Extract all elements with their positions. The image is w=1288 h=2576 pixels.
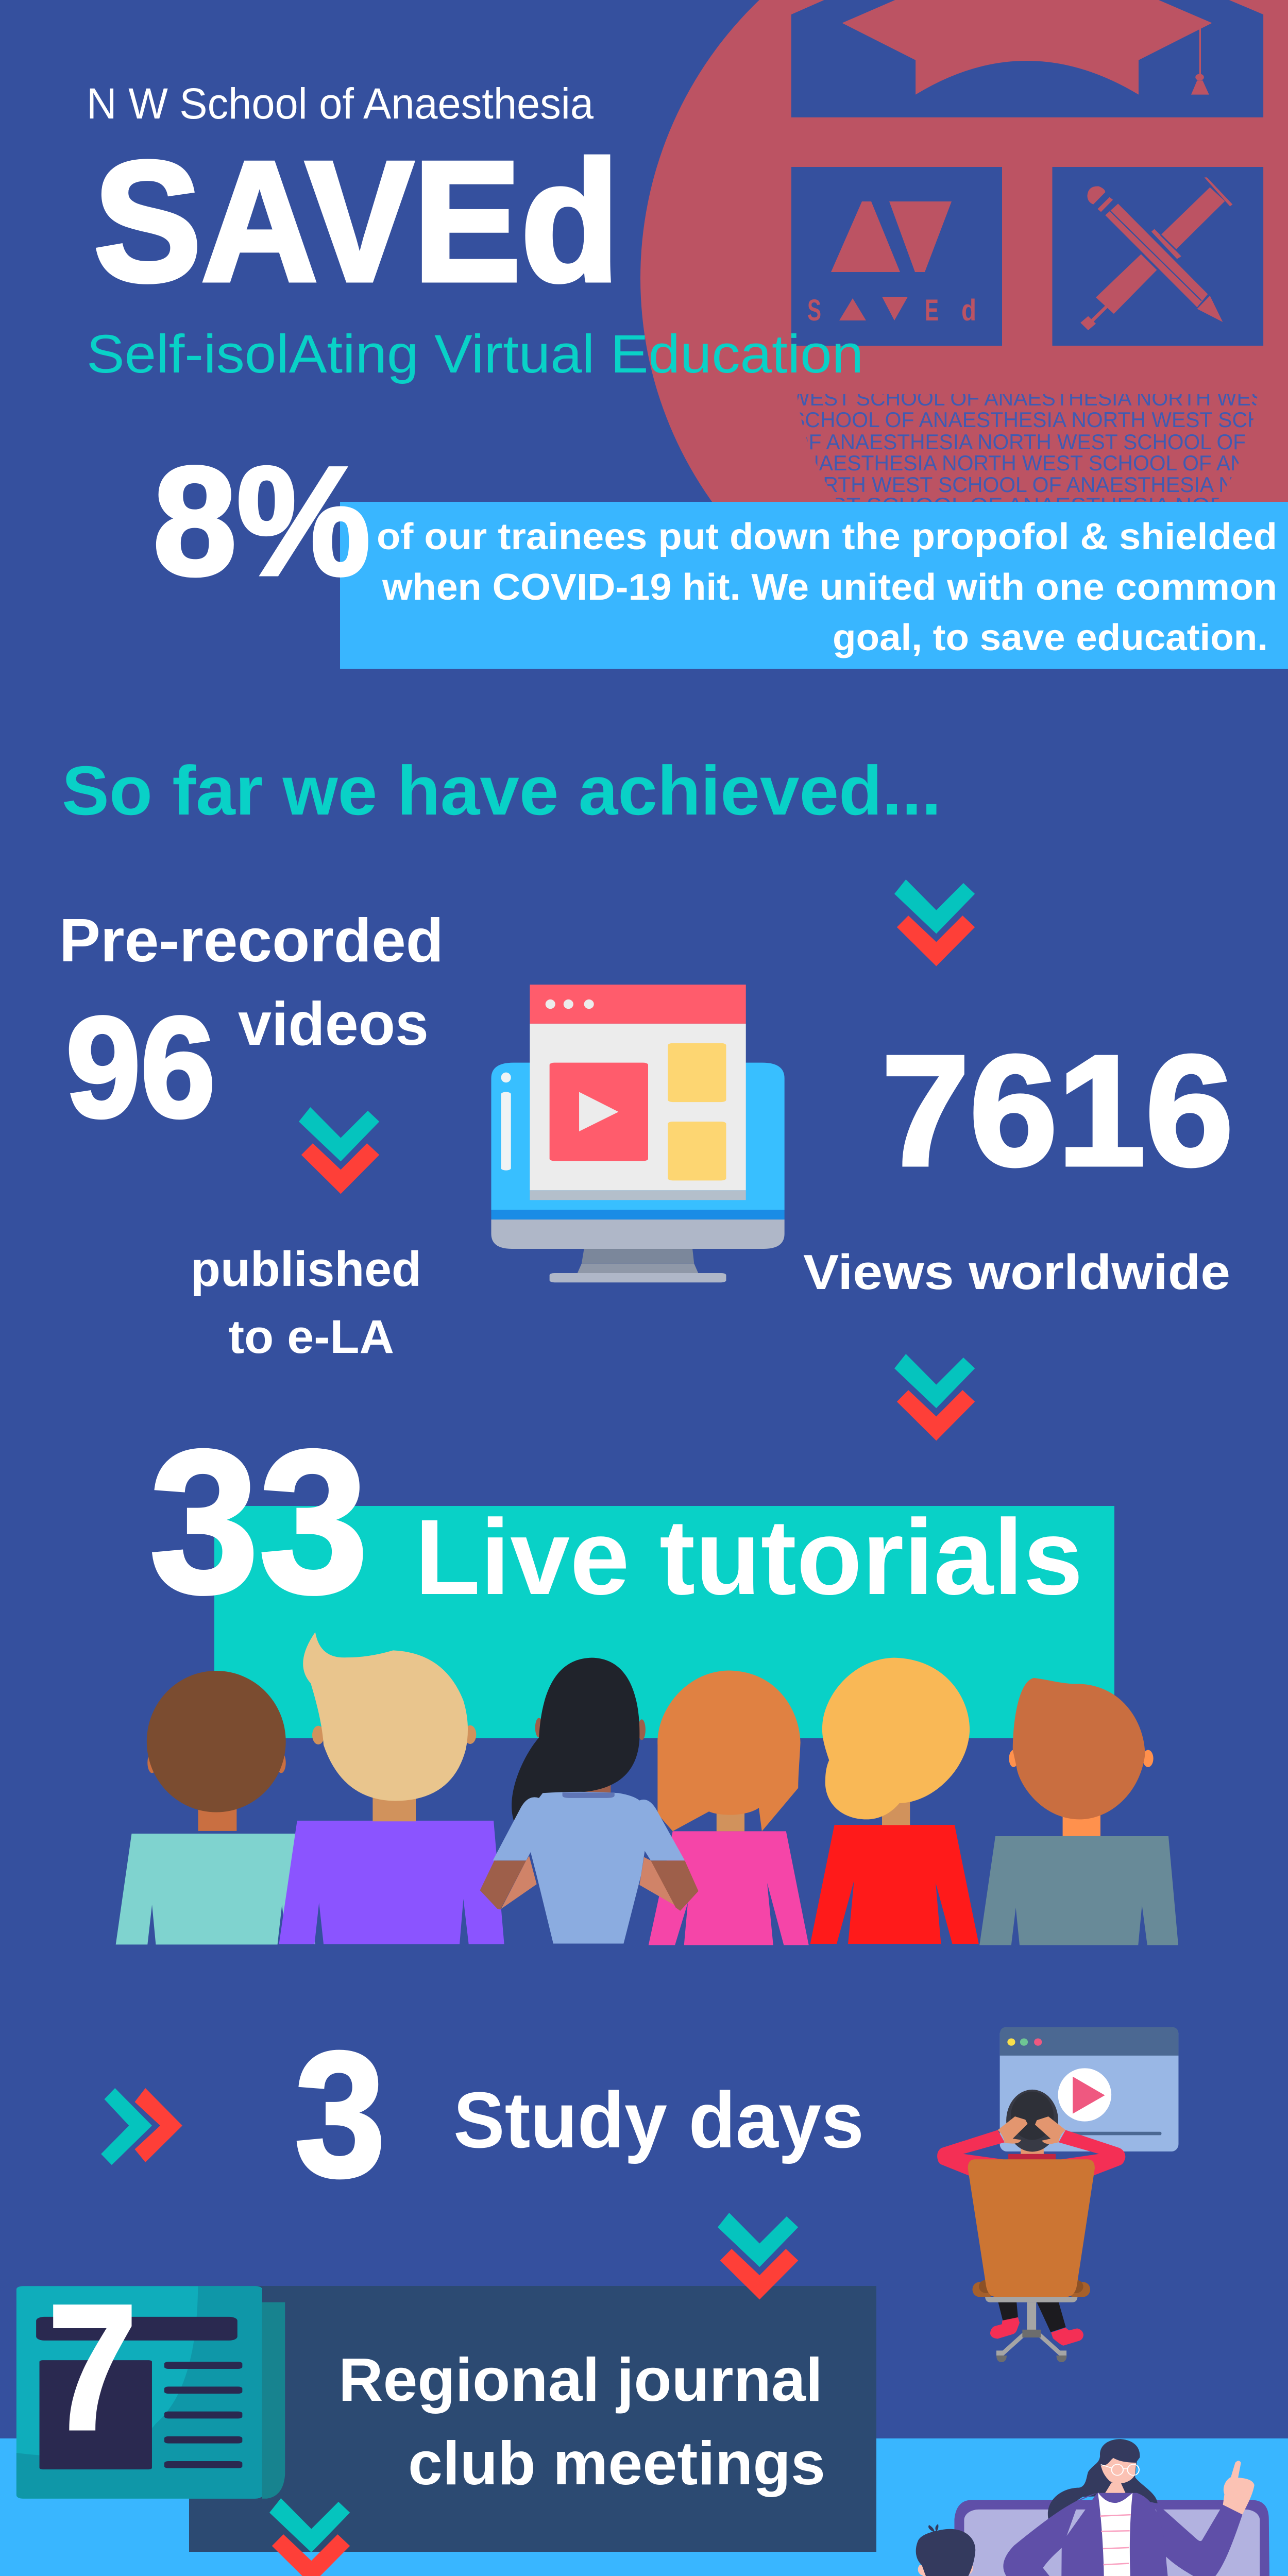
repeating school name text xyxy=(798,394,1257,502)
big number: 33: 33 xyxy=(149,1408,368,1635)
arrow: chevron right xyxy=(101,2088,182,2165)
man from behind xyxy=(820,2524,1180,2576)
person 1 xyxy=(116,1671,315,1944)
icon: SAVEd logo: S xyxy=(807,294,821,327)
title: school name: N W School of Anaesthesia xyxy=(87,79,594,128)
big number: 8%: 8% xyxy=(153,434,370,607)
icon: newspaper xyxy=(16,2286,285,2499)
computer monitor xyxy=(954,2500,1270,2576)
big number: 3: 3 xyxy=(295,2015,385,2214)
icon: monitor with video window xyxy=(491,985,785,1282)
statement text: goal, to save education. xyxy=(833,617,1268,658)
person 3 xyxy=(480,1658,699,1943)
video window xyxy=(1000,2027,1178,2151)
person 2 xyxy=(279,1632,504,1944)
subtitle: Self-isolAting Virtual Education xyxy=(87,324,863,384)
icon: SAVEd logo xyxy=(791,167,1002,346)
text: published to e-LA: published xyxy=(191,1242,421,1297)
text: views worldwide: Views worldwide xyxy=(803,1245,1230,1300)
big number: 7616: 7616 xyxy=(882,1023,1233,1198)
header decorative circle with icons xyxy=(640,0,1288,502)
big number: 7: 7 xyxy=(48,2268,137,2467)
text: published to e-LA: to e-LA xyxy=(228,1311,394,1363)
person 6 xyxy=(979,1678,1178,1945)
woman on screen xyxy=(1003,2439,1255,2576)
arrow: chevron down xyxy=(299,1107,379,1194)
icon: pencil and syringe xyxy=(1052,167,1263,346)
statement text: when COVID-19 hit. We united with one common xyxy=(382,567,1277,608)
circle background xyxy=(640,0,1288,663)
title: SAVEd: SAVEd xyxy=(94,126,619,317)
panel: journal club dark box xyxy=(189,2286,876,2552)
big number: 96: 96 xyxy=(66,987,215,1147)
arrow: chevron down xyxy=(269,2498,350,2576)
panel: teal tutorials banner xyxy=(214,1506,1114,1738)
statement text xyxy=(377,516,1277,658)
arrow: chevron down xyxy=(718,2213,798,2299)
repeating school name text: OF ANAESTHESIA NORTH WEST SCHOOL OF xyxy=(792,430,1246,454)
person 4 xyxy=(649,1671,809,1945)
icon: SAVEd logo: E xyxy=(925,294,939,327)
arrow: chevron down (over box) xyxy=(720,2249,798,2299)
text: regional journal club meetings xyxy=(338,2346,825,2498)
text: regional journal club meetings: club meetings xyxy=(408,2429,825,2498)
text: study days: Study days xyxy=(453,2076,864,2164)
arrow: chevron down xyxy=(894,1354,975,1440)
text: videos: videos xyxy=(238,990,429,1058)
text: live tutorials: Live tutorials xyxy=(415,1498,1083,1617)
statement text: of our trainees put down the propofol & shielded xyxy=(377,516,1277,557)
text: regional journal club meetings: Regional journal xyxy=(338,2346,823,2414)
text: pre-recorded: Pre-recorded xyxy=(59,906,444,975)
illustration: virtual viva on computer xyxy=(775,2439,1288,2576)
text: published to e-LA xyxy=(191,1242,421,1363)
panel: statement box xyxy=(340,502,1288,669)
person on chair xyxy=(937,2090,1125,2362)
repeating school name text: WEST SCHOOL OF ANAESTHESIA NORTH WEST xyxy=(790,386,1278,410)
icon: SAVEd logo: d xyxy=(961,294,976,327)
arrow: chevron down xyxy=(894,879,975,966)
repeating school name text: WEST SCHOOL OF ANAESTHESIA NORTH xyxy=(793,493,1257,517)
heading: so far: So far we have achieved... xyxy=(62,752,941,829)
illustration: person watching video xyxy=(937,2027,1178,2362)
icon: graduation cap xyxy=(791,0,1263,117)
illustration: audience of six people xyxy=(116,1632,1178,1945)
panel: light blue lower section xyxy=(0,2438,1288,2576)
person 5 xyxy=(810,1658,979,1944)
